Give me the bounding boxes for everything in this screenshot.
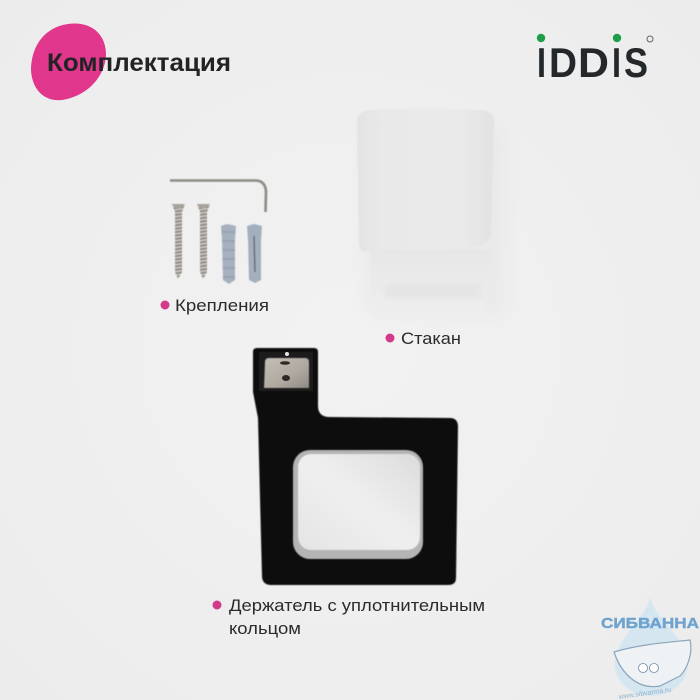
screws (172, 204, 210, 279)
logo: IDDIS: I (537, 39, 546, 86)
logo: IDDIS: S (624, 39, 648, 86)
logo: IDDIS (537, 34, 653, 86)
steel plate (264, 352, 309, 388)
label: holder (212, 596, 485, 638)
label: fasteners: Крепления (175, 296, 269, 315)
logo: IDDIS: D (578, 39, 609, 86)
logo: IDDIS: D (549, 39, 577, 86)
glass tumbler (357, 108, 505, 318)
logo: IDDIS: I (612, 39, 621, 86)
fasteners (170, 180, 266, 284)
hex key (170, 180, 266, 212)
seal ring window (293, 450, 423, 559)
watermark: Sibvanna (601, 597, 699, 700)
label: holder: кольцом (229, 619, 301, 638)
label: holder: Держатель с уплотнительным (229, 596, 485, 615)
wall plugs (221, 224, 262, 284)
label: tumbler: Стакан (401, 329, 461, 348)
watermark: Sibvanna: СИБВАННА (601, 615, 699, 632)
mount recess (259, 352, 313, 391)
black holder (253, 348, 458, 585)
heading: Комплектация (47, 49, 231, 77)
pink blob behind heading (31, 24, 106, 100)
